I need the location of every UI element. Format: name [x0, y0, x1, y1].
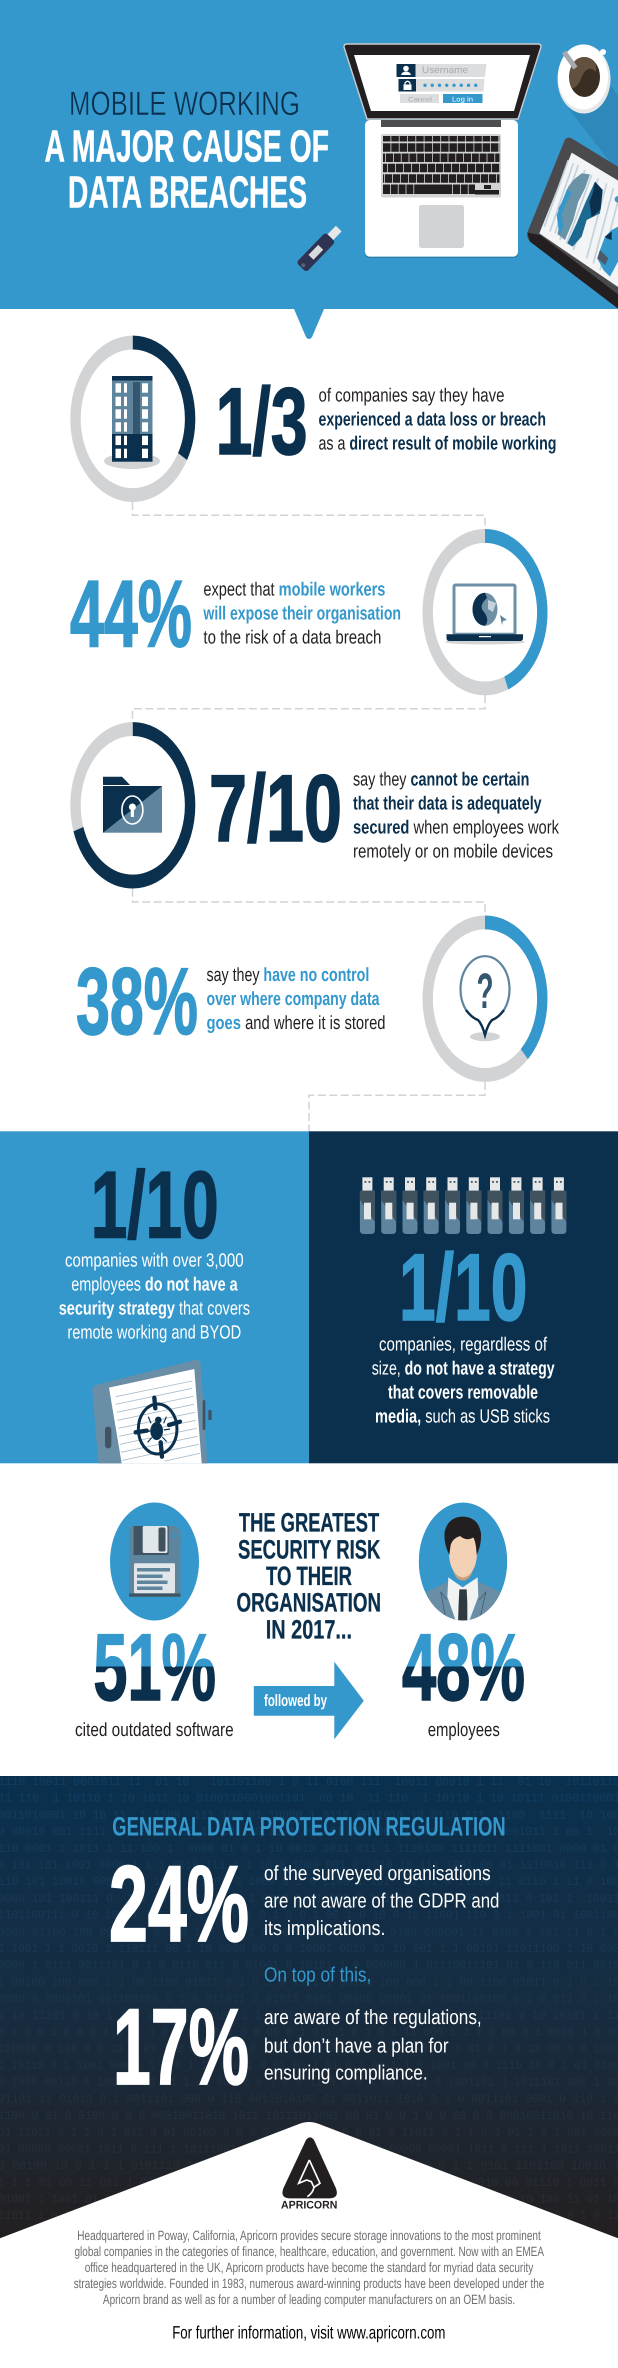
login form: Username — [422, 65, 468, 76]
number: 7/10: 7/10 — [209, 756, 342, 862]
description — [59, 1251, 250, 1344]
number: 38%: 38% — [76, 949, 198, 1055]
description: companies, regardless of — [379, 1335, 548, 1356]
number: 1/10: 1/10 — [399, 1235, 527, 1341]
description: are not aware of the GDPR and — [264, 1890, 499, 1913]
description — [353, 770, 559, 863]
icon: question map pin: ? — [476, 963, 494, 1019]
description: over where company data — [206, 989, 380, 1010]
title: DATA BREACHES — [68, 166, 307, 217]
description: employees do not have a — [71, 1275, 238, 1296]
number: 1/3: 1/3 — [216, 369, 308, 475]
stat 4: 38% — [76, 922, 542, 1075]
description: that their data is adequately — [353, 794, 542, 815]
ring chart: 44% — [428, 536, 542, 688]
stat: 17% — [113, 1986, 482, 2107]
icon: question map pin — [460, 956, 509, 1041]
callout: on top of this: On top of this, — [264, 1964, 371, 1987]
description — [206, 965, 386, 1034]
description: of the surveyed organisations — [264, 1862, 491, 1885]
description: to the risk of a data breach — [203, 628, 381, 649]
description — [318, 386, 556, 455]
login form: Cancel — [408, 96, 433, 104]
stat 1: one third — [76, 343, 556, 495]
description: say they cannot be certain — [353, 770, 529, 791]
panel: removable media strategy — [309, 1131, 618, 1463]
description: goes and where it is stored — [206, 1013, 386, 1034]
connector dashed lines — [132, 502, 485, 1131]
footer white panel — [0, 2122, 618, 2368]
title: A MAJOR CAUSE OF — [44, 121, 329, 172]
description: ensuring compliance. — [264, 2061, 428, 2084]
description: secured when employees work — [353, 818, 559, 839]
description: experienced a data loss or breach — [318, 410, 546, 431]
description: size, do not have a strategy — [372, 1359, 555, 1380]
stat 3: 7/10 — [76, 729, 559, 882]
icon: floppy disk — [110, 1502, 199, 1620]
caption: cited outdated software — [75, 1720, 234, 1741]
description: of companies say they have — [318, 386, 504, 407]
call to action: For further information, visit www.apricorn.com — [172, 2322, 445, 2342]
icon: locked folder — [103, 777, 162, 833]
stat: 24% — [109, 1843, 499, 1964]
icon: laptop — [344, 44, 541, 258]
heading: greatest security risk: ORGANISATION — [236, 1588, 381, 1618]
arrow: followed by: followed by — [264, 1692, 328, 1710]
icon: businessman — [419, 1502, 507, 1627]
heading: greatest security risk: SECURITY RISK — [238, 1534, 381, 1564]
icon: coffee cup — [558, 44, 618, 172]
icon row: ten USB sticks — [360, 1177, 566, 1234]
description: security strategy that covers — [59, 1299, 250, 1320]
title: MOBILE WORKING — [69, 85, 300, 123]
description: expect that mobile workers — [203, 580, 385, 601]
description: but don’t have a plan for — [264, 2034, 449, 2057]
header background — [0, 0, 618, 339]
description: are aware of the regulations, — [264, 2006, 482, 2029]
description: that covers removable — [388, 1383, 538, 1404]
description — [203, 580, 401, 649]
caption: employees — [428, 1720, 500, 1741]
icon: USB stick — [296, 224, 344, 272]
icon: office building — [104, 376, 160, 469]
heading: greatest security risk — [236, 1508, 381, 1644]
description: as a direct result of mobile working — [318, 434, 556, 455]
description — [264, 2006, 482, 2084]
login form — [396, 64, 486, 104]
description: its implications. — [264, 1917, 386, 1940]
logo wordmark: APRICORN — [281, 2199, 337, 2211]
laptop base — [365, 120, 518, 257]
heading: greatest security risk: THE GREATEST — [239, 1508, 380, 1538]
arrow: followed by — [254, 1662, 364, 1739]
description: will expose their organisation — [203, 604, 401, 625]
logo mark — [282, 2137, 337, 2198]
number: 48%: 48% — [402, 1615, 525, 1721]
heading: greatest security risk: TO THEIR — [266, 1561, 352, 1591]
stat: employees — [402, 1502, 525, 1741]
description: say they have no control — [206, 965, 369, 986]
ring chart: 38% — [428, 922, 542, 1075]
number: 51%: 51% — [93, 1615, 216, 1721]
icon: tablet — [527, 138, 618, 313]
number: 1/10: 1/10 — [91, 1152, 219, 1258]
number: 44%: 44% — [70, 562, 192, 668]
icon: tablet with bug target — [92, 1360, 212, 1463]
stat: 17%: 17% — [113, 1986, 249, 2107]
description: remotely or on mobile devices — [353, 842, 553, 863]
ring chart: 7/10 — [76, 729, 190, 882]
trackpad — [419, 205, 464, 248]
keyboard — [381, 134, 501, 198]
icon: laptop with globe — [445, 585, 525, 644]
about text — [74, 2228, 544, 2307]
description: companies with over 3,000 — [65, 1251, 244, 1272]
description: media, such as USB sticks — [375, 1407, 550, 1428]
description — [264, 1862, 499, 1940]
login form: Log in — [452, 96, 473, 104]
logo: Apricorn — [281, 2137, 337, 2211]
title — [44, 85, 329, 217]
heading: greatest security risk: IN 2017... — [266, 1614, 352, 1644]
stat: outdated software — [75, 1502, 234, 1741]
panel: GDPR background — [0, 1775, 618, 2246]
ring chart: 1/3 — [76, 343, 190, 495]
description — [372, 1335, 555, 1428]
laptop lid — [344, 44, 541, 119]
description: remote working and BYOD — [67, 1323, 241, 1344]
stat: 24%: 24% — [109, 1843, 249, 1964]
stat 2: 44% — [70, 536, 542, 688]
panel: remote working strategy — [0, 1131, 309, 1463]
